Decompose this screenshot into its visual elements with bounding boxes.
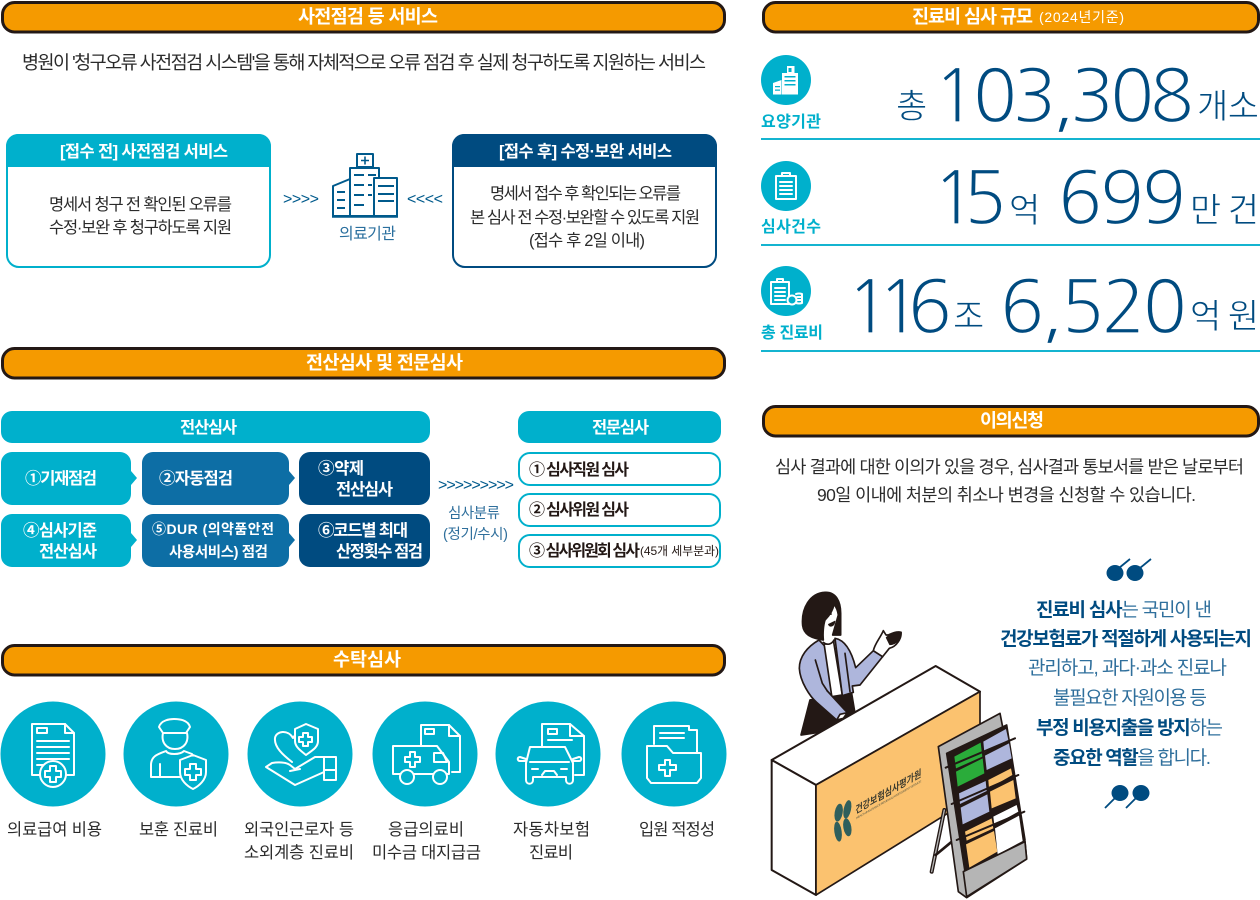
heading: review scale xyxy=(764,2,1258,32)
heading: expert review: 전문심사 xyxy=(592,418,649,437)
heading: commissioned review: 수탁심사 xyxy=(333,649,401,670)
arrow: long chevrons: >>>>>>>>> xyxy=(438,477,514,494)
list: expert review steps: ③ 심사위원회 심사 xyxy=(529,542,640,560)
stat: institutions: 요양기관 xyxy=(761,113,821,131)
stat: review cases: 억 xyxy=(1009,192,1040,230)
icon item: car insurance: 진료비 xyxy=(529,843,573,862)
stat: total cost: 6,520 xyxy=(1000,271,1187,344)
stat: review cases: 만 건 xyxy=(1190,192,1259,230)
stat: review cases: 심사건수 xyxy=(761,218,821,236)
step: DUR check: 사용서비스) 점검 xyxy=(169,544,268,561)
panel: computer and expert review xyxy=(1,348,724,567)
step: DUR check xyxy=(142,514,295,567)
card: before submission: 수정·보완 후 청구하도록 지원 xyxy=(49,218,232,237)
card: after submission: 본 심사 전 수정·보완할 수 있도록 지원 xyxy=(470,208,700,227)
step: code limit check: 산정횟수 점검 xyxy=(336,542,423,561)
icon item: car insurance xyxy=(496,702,600,862)
stat: review cases xyxy=(761,161,1260,246)
step: drug review: 전산심사 xyxy=(336,480,393,499)
icon item: foreign workers: 외국인근로자 등 xyxy=(244,820,354,839)
step: criteria review: ④심사기준 xyxy=(23,521,97,540)
card: after submission: (접수 후 2일 이내) xyxy=(529,231,645,250)
icon item: medical aid xyxy=(0,702,106,839)
card: before submission: [접수 전] 사전점검 서비스 xyxy=(60,142,228,161)
text: callout message: 건강보험료가 적절하게 사용되는지 xyxy=(1000,628,1252,650)
icon item: emergency xyxy=(372,702,481,862)
heading: computer and expert review: 전산심사 및 전문심사 xyxy=(306,352,463,373)
desk xyxy=(772,666,980,895)
icon item: veterans: 보훈 진료비 xyxy=(139,820,218,839)
text: callout message: 불필요한 자원이용 등 xyxy=(1053,687,1207,709)
desk logo: HEALTH INSURANCE REVIEW & ASSESSMENT SERVICE xyxy=(856,779,922,820)
heading: computer review xyxy=(1,411,430,443)
woman xyxy=(799,592,901,735)
step: drug review: ③약제 xyxy=(318,459,364,478)
heading: review scale: (2024년기준) xyxy=(1039,9,1124,25)
list: expert review steps: (45개 세부분과) xyxy=(640,544,719,558)
step: code limit check xyxy=(299,514,430,567)
stat: institutions: 총 xyxy=(896,88,927,126)
label: review classification: 심사분류 xyxy=(448,505,500,522)
list: expert review steps xyxy=(519,453,720,567)
arrow: left chevrons: <<<< xyxy=(407,191,443,208)
heading: appeal xyxy=(764,406,1258,436)
card: before submission: 명세서 청구 전 확인된 오류를 xyxy=(49,195,232,214)
text: appeal description: 심사 결과에 대한 이의가 있을 경우, 심사결과 통보서를 받은 날로부터 xyxy=(775,457,1244,477)
panel: review scale xyxy=(761,2,1260,352)
card: after submission: [접수 후] 수정·보완 서비스 xyxy=(499,142,672,161)
step: entry check: ①기재점검 xyxy=(25,469,97,488)
step: drug review xyxy=(299,452,430,505)
card: before submission xyxy=(6,134,271,267)
card: after submission xyxy=(452,134,717,267)
step: automatic check xyxy=(142,452,295,505)
heading: review scale: 진료비 심사 규모 xyxy=(912,6,1033,27)
step: entry check xyxy=(1,452,137,505)
icon item: emergency: 미수금 대지급금 xyxy=(372,843,481,862)
text: appeal description xyxy=(775,457,1244,505)
brochure stand xyxy=(932,713,1027,898)
text: description: 병원이 '청구오류 사전점검 시스템'을 통해 자체적으로 오류 점검 후 실제 청구하도록 지원하는 서비스 xyxy=(22,52,706,73)
step: DUR check: ⑤DUR (의약품안전 xyxy=(152,521,274,537)
icon item: foreign workers xyxy=(244,702,354,862)
text: appeal description: 90일 이내에 처분의 취소나 변경을 신청할 수 있습니다. xyxy=(817,485,1196,505)
heading: computer and expert review xyxy=(2,348,724,378)
icon: hospital xyxy=(332,154,398,216)
step: automatic check: ②자동점검 xyxy=(159,469,233,488)
icon item: car insurance: 자동차보험 xyxy=(513,820,590,839)
icon item: inpatient xyxy=(622,702,726,839)
stat: review cases: 15 xyxy=(932,162,1007,235)
list: expert review steps: ② 심사위원 심사 xyxy=(529,501,629,519)
icon item: medical aid: 의료급여 비용 xyxy=(7,820,102,839)
stat: total cost: 억 원 xyxy=(1190,298,1259,336)
icon: opening quote xyxy=(1106,559,1151,581)
step: criteria review: 전산심사 xyxy=(39,542,97,561)
text: callout message: 부정 비용지출을 방지하는 xyxy=(1036,717,1223,739)
panel: commissioned review xyxy=(0,646,726,862)
desk logo: 건강보험심사평가원 xyxy=(855,766,921,817)
step: criteria review xyxy=(1,514,137,567)
text: callout message xyxy=(1000,599,1252,769)
panel: appeal xyxy=(764,406,1258,505)
stat: total cost xyxy=(761,266,1260,352)
stat: total cost: 총 진료비 xyxy=(761,324,823,342)
stat: institutions: 103,308 xyxy=(933,60,1194,133)
step: code limit check: ⑥코드별 최대 xyxy=(318,521,408,540)
icon item: foreign workers: 소외계층 진료비 xyxy=(244,843,354,862)
icon item: veterans xyxy=(124,702,228,839)
heading: pre-check services: 사전점검 등 서비스 xyxy=(298,6,438,27)
arrow: right chevrons: >>>> xyxy=(283,191,319,208)
card: after submission: 명세서 접수 후 확인되는 오류를 xyxy=(490,184,681,203)
heading: commissioned review xyxy=(2,646,724,675)
heading: computer review: 전산심사 xyxy=(180,418,237,437)
icon: closing quote xyxy=(1105,785,1150,808)
illustration: reception desk xyxy=(772,592,1027,898)
stat: review cases: 699 xyxy=(1058,162,1186,235)
heading: pre-check services xyxy=(2,2,724,32)
list: expert review steps: ① 심사직원 심사 xyxy=(529,461,629,479)
heading: expert review xyxy=(518,411,721,443)
icon item: inpatient: 입원 적정성 xyxy=(639,820,715,839)
label: medical institution: 의료기관 xyxy=(339,225,396,243)
icon item: emergency: 응급의료비 xyxy=(388,820,464,839)
heading: appeal: 이의신청 xyxy=(980,410,1044,431)
text: callout message: 진료비 심사는 국민이 낸 xyxy=(1036,599,1212,621)
stat: total cost: 116 xyxy=(846,271,952,344)
label: review classification: (정기/수시) xyxy=(443,526,508,543)
desk logo xyxy=(833,766,922,842)
text: callout message: 관리하고, 과다·과소 진료나 xyxy=(1028,657,1227,679)
stat: institutions xyxy=(761,55,1260,140)
stat: institutions: 개소 xyxy=(1197,88,1259,126)
stat: total cost: 조 xyxy=(953,298,984,336)
label: review classification xyxy=(443,505,508,543)
panel: pre-check services xyxy=(2,2,724,267)
text: callout message: 중요한 역할을 합니다. xyxy=(1053,747,1211,769)
